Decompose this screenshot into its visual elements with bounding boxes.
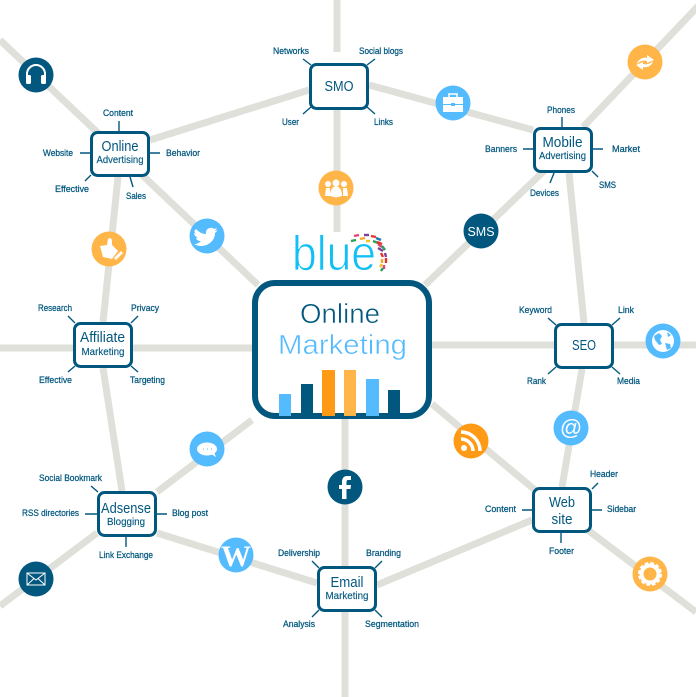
icon: at sign xyxy=(554,410,588,446)
node: online advertising: Effective xyxy=(55,184,89,194)
node: affiliate marketing: Research xyxy=(38,303,72,313)
node: affiliate marketing: Privacy xyxy=(131,303,159,313)
node: mobile advertising: Market xyxy=(612,144,640,154)
node: adsense blogging: Blogging xyxy=(107,516,145,528)
node: email marketing xyxy=(278,548,419,629)
icon: envelope xyxy=(18,562,54,596)
node: email marketing: Email xyxy=(330,575,364,591)
icon: wordpress: W xyxy=(221,540,251,573)
node: online advertising: Sales xyxy=(126,191,146,201)
node: mobile advertising: Devices xyxy=(530,188,559,198)
node: SEO xyxy=(519,305,641,386)
node: email marketing: Analysis xyxy=(283,619,315,629)
node: web site: site xyxy=(552,512,572,528)
node: web site: Header xyxy=(590,469,618,479)
node: web site: Content xyxy=(485,504,516,514)
node: SEO: Link xyxy=(618,305,634,315)
central panel: online marketing xyxy=(255,283,429,416)
node: mobile advertising xyxy=(485,105,640,198)
node: SMO: User xyxy=(282,117,299,127)
node: affiliate marketing: Affiliate xyxy=(80,330,125,346)
node: email marketing: Marketing xyxy=(326,590,369,602)
icon: speech bubble xyxy=(190,432,224,466)
icon: gear xyxy=(632,556,668,592)
node: adsense blogging: RSS directories xyxy=(22,508,79,518)
icon: briefcase xyxy=(436,86,470,120)
node: SMO: Links xyxy=(374,117,393,127)
node: adsense blogging: Adsense xyxy=(101,501,151,517)
node: adsense blogging: Blog post xyxy=(172,508,208,518)
icon: twitter bird xyxy=(190,218,224,254)
central heading: Online xyxy=(300,298,380,329)
node: online advertising: Content xyxy=(103,108,133,118)
icon: globe xyxy=(646,324,680,358)
node: web site: Sidebar xyxy=(607,504,636,514)
node: online advertising: Website xyxy=(43,148,73,158)
node: SEO: Media xyxy=(617,376,641,386)
node: online advertising xyxy=(43,108,200,201)
node: mobile advertising: Banners xyxy=(485,144,517,154)
icon: at sign: @ xyxy=(560,415,582,440)
node: SEO: Keyword xyxy=(519,305,552,315)
node: adsense blogging xyxy=(22,473,208,560)
node: mobile advertising: Mobile xyxy=(542,135,582,151)
central heading xyxy=(278,298,407,360)
node: adsense blogging: Link Exchange xyxy=(99,550,153,560)
central heading: Marketing xyxy=(278,329,407,360)
node: web site xyxy=(485,469,636,556)
node: web site: Web xyxy=(549,495,575,511)
node: adsense blogging: Social Bookmark xyxy=(39,473,102,483)
node: affiliate marketing xyxy=(38,303,165,385)
node: SEO: Rank xyxy=(527,376,546,386)
node: online advertising: Online xyxy=(102,139,138,155)
node: mobile advertising: Phones xyxy=(547,105,575,115)
node: email marketing: Segmentation xyxy=(365,619,419,629)
icon: sync arrows xyxy=(628,44,662,80)
node: online advertising: Behavior xyxy=(166,148,200,158)
node: mobile advertising: SMS xyxy=(599,180,616,190)
icon: SMS badge xyxy=(464,214,498,248)
node: SMO: SMO xyxy=(324,79,354,95)
icon: facebook f xyxy=(328,470,362,504)
icon: people group xyxy=(318,170,354,206)
icon: rss feed xyxy=(454,424,488,458)
node: SMO xyxy=(273,46,403,127)
node: SEO: SEO xyxy=(572,338,596,354)
node: mobile advertising: Advertising xyxy=(539,150,586,162)
icon: SMS badge: SMS xyxy=(468,224,495,239)
node: email marketing: Delivership xyxy=(278,548,320,558)
icon: thumbs up xyxy=(92,232,126,266)
bar chart xyxy=(279,370,400,416)
node: web site: Footer xyxy=(549,546,574,556)
node: SMO: Social blogs xyxy=(359,46,403,56)
node: affiliate marketing: Marketing xyxy=(82,346,125,358)
node: online advertising: Advertising xyxy=(96,154,144,166)
node: email marketing: Branding xyxy=(366,548,401,558)
icon: headphones xyxy=(18,58,54,92)
node: affiliate marketing: Targeting xyxy=(130,375,165,385)
node: SMO: Networks xyxy=(273,46,309,56)
logo: blue: blue xyxy=(292,227,376,281)
node: affiliate marketing: Effective xyxy=(39,375,72,385)
